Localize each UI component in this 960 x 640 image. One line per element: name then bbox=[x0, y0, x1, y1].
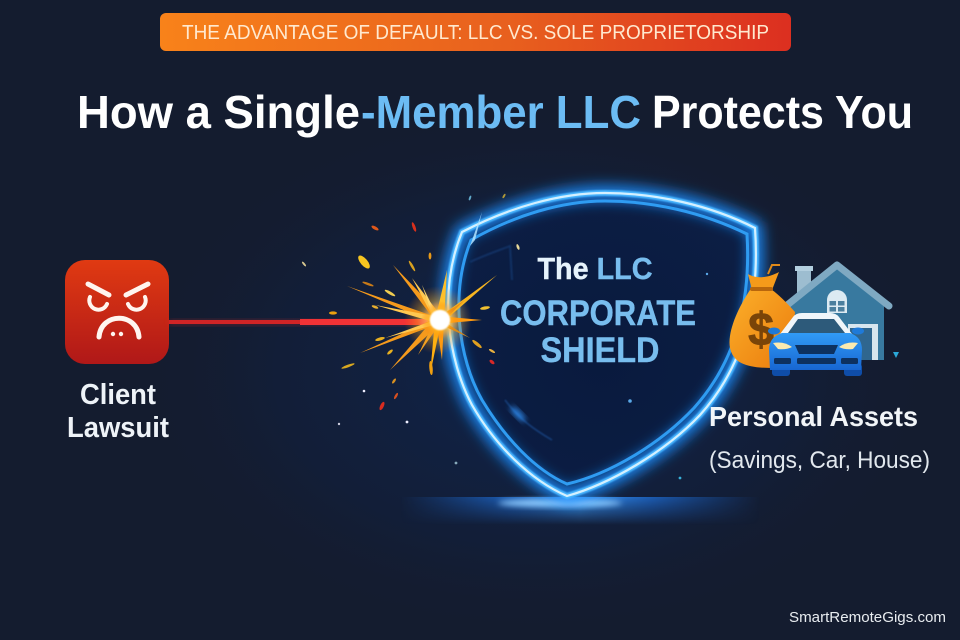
label: client lawsuit: Lawsuit bbox=[67, 412, 169, 444]
icon: personal assets bbox=[730, 265, 899, 376]
shield label: The LLC bbox=[538, 251, 652, 286]
icon: angry client bbox=[65, 260, 169, 364]
title: Protects You bbox=[652, 86, 913, 138]
label: client lawsuit: Client bbox=[80, 379, 156, 411]
title: -Member LLC bbox=[361, 86, 641, 138]
shield label: CORPORATE bbox=[500, 294, 696, 333]
label: personal assets: Personal Assets bbox=[709, 401, 918, 432]
impact sparks bbox=[301, 193, 708, 479]
floor glow bbox=[400, 497, 760, 525]
icon: car bbox=[768, 313, 864, 376]
title bbox=[77, 86, 913, 138]
watermark: SmartRemoteGigs.com bbox=[789, 609, 946, 626]
shield label bbox=[500, 251, 696, 370]
shield label: SHIELD bbox=[540, 331, 660, 370]
label: personal assets: (Savings, Car, House) bbox=[709, 447, 930, 474]
arrow: lawsuit strike line bbox=[169, 319, 431, 325]
icon: money bag: $ bbox=[748, 303, 774, 355]
icon: house bbox=[786, 265, 889, 360]
label: personal assets bbox=[709, 401, 930, 474]
top banner: THE ADVANTAGE OF DEFAULT: LLC VS. SOLE PROPRIETORSHIP bbox=[182, 22, 769, 44]
icon: money bag bbox=[730, 265, 795, 368]
label: client lawsuit bbox=[67, 379, 169, 444]
top banner bbox=[160, 13, 791, 51]
title: How a Single bbox=[77, 86, 360, 138]
shield bbox=[448, 193, 756, 496]
